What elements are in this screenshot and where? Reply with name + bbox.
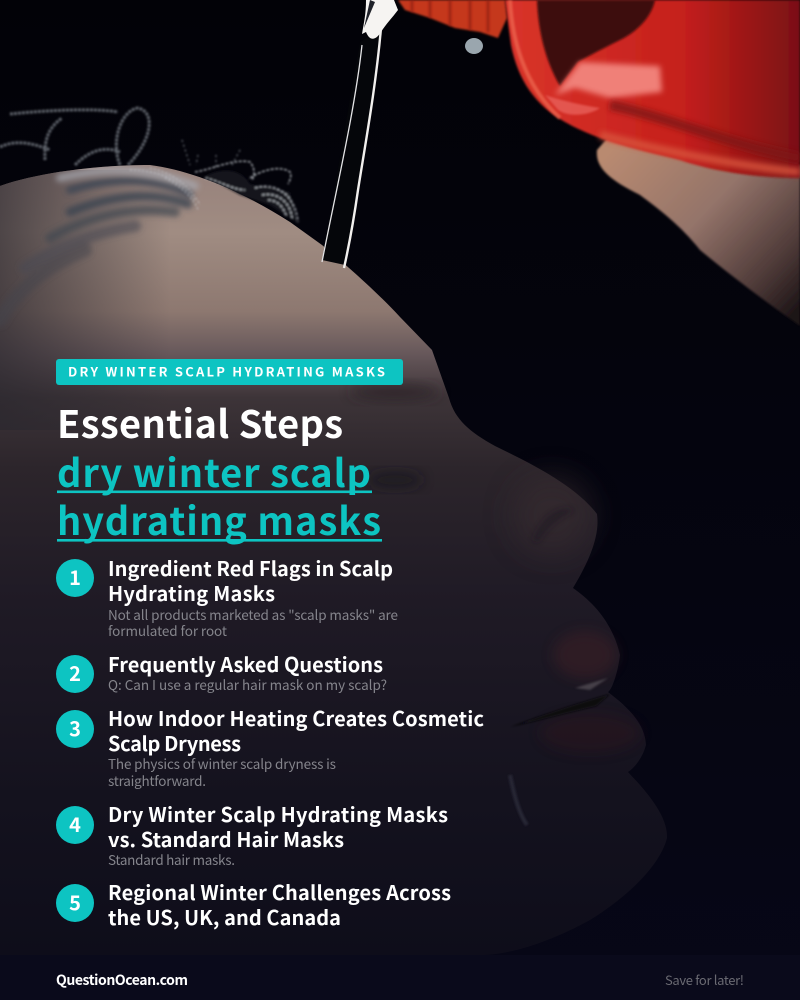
photo: red bottle (398, 0, 800, 178)
step 1 (56, 553, 398, 640)
step 2 (56, 649, 387, 694)
photo: hand under bottle (597, 135, 800, 326)
step 5 (56, 877, 451, 931)
photo: hair shading (0, 168, 200, 430)
title highlight: line 2: hydrating masks (57, 491, 381, 546)
photo: facial feature shadows (350, 383, 640, 825)
step 3 (56, 703, 484, 790)
step 5: 5 (69, 887, 81, 916)
photo: water droplet (465, 38, 483, 54)
step 3: The physics of winter scalp dryness is (108, 753, 336, 773)
step 5: Regional Winter Challenges Across (108, 877, 451, 906)
step 4: Dry Winter Scalp Hydrating Masks (108, 799, 448, 828)
title highlight: line 1: dry winter scalp (57, 443, 371, 498)
step 3: Scalp Dryness (108, 728, 241, 757)
title (57, 394, 382, 546)
step 3: 3 (69, 713, 81, 742)
photo: front hair wisps (182, 140, 298, 222)
title: Essential Steps (57, 394, 343, 449)
step 2: 2 (69, 658, 81, 687)
photo: water stream (322, 0, 398, 268)
footer: site name: QuestionOcean.com (56, 970, 188, 990)
step 2: Frequently Asked Questions (108, 649, 383, 678)
footer bar (0, 955, 800, 1000)
photo: stray hair curl (0, 108, 149, 165)
step 1: Ingredient Red Flags in Scalp (108, 553, 393, 582)
step 2: Q: Can I use a regular hair mask on my scalp? (108, 674, 387, 694)
category tag (56, 359, 403, 385)
step 3: straightforward. (108, 770, 206, 790)
step 1: 1 (69, 562, 81, 591)
step 1: Hydrating Masks (108, 578, 275, 607)
footer: save note: Save for later! (665, 970, 744, 989)
step 1: formulated for root (108, 620, 227, 640)
step 4: 4 (69, 809, 81, 838)
photo: face silhouette (0, 165, 667, 955)
category tag: DRY WINTER SCALP HYDRATING MASKS (68, 362, 385, 380)
step 4: vs. Standard Hair Masks (108, 824, 344, 853)
step 5: the US, UK, and Canada (108, 902, 341, 931)
step 3: How Indoor Heating Creates Cosmetic (108, 703, 484, 732)
step 1: Not all products marketed as "scalp masks" are (108, 604, 398, 624)
step 4: Standard hair masks. (108, 849, 235, 869)
step 4 (56, 799, 448, 869)
